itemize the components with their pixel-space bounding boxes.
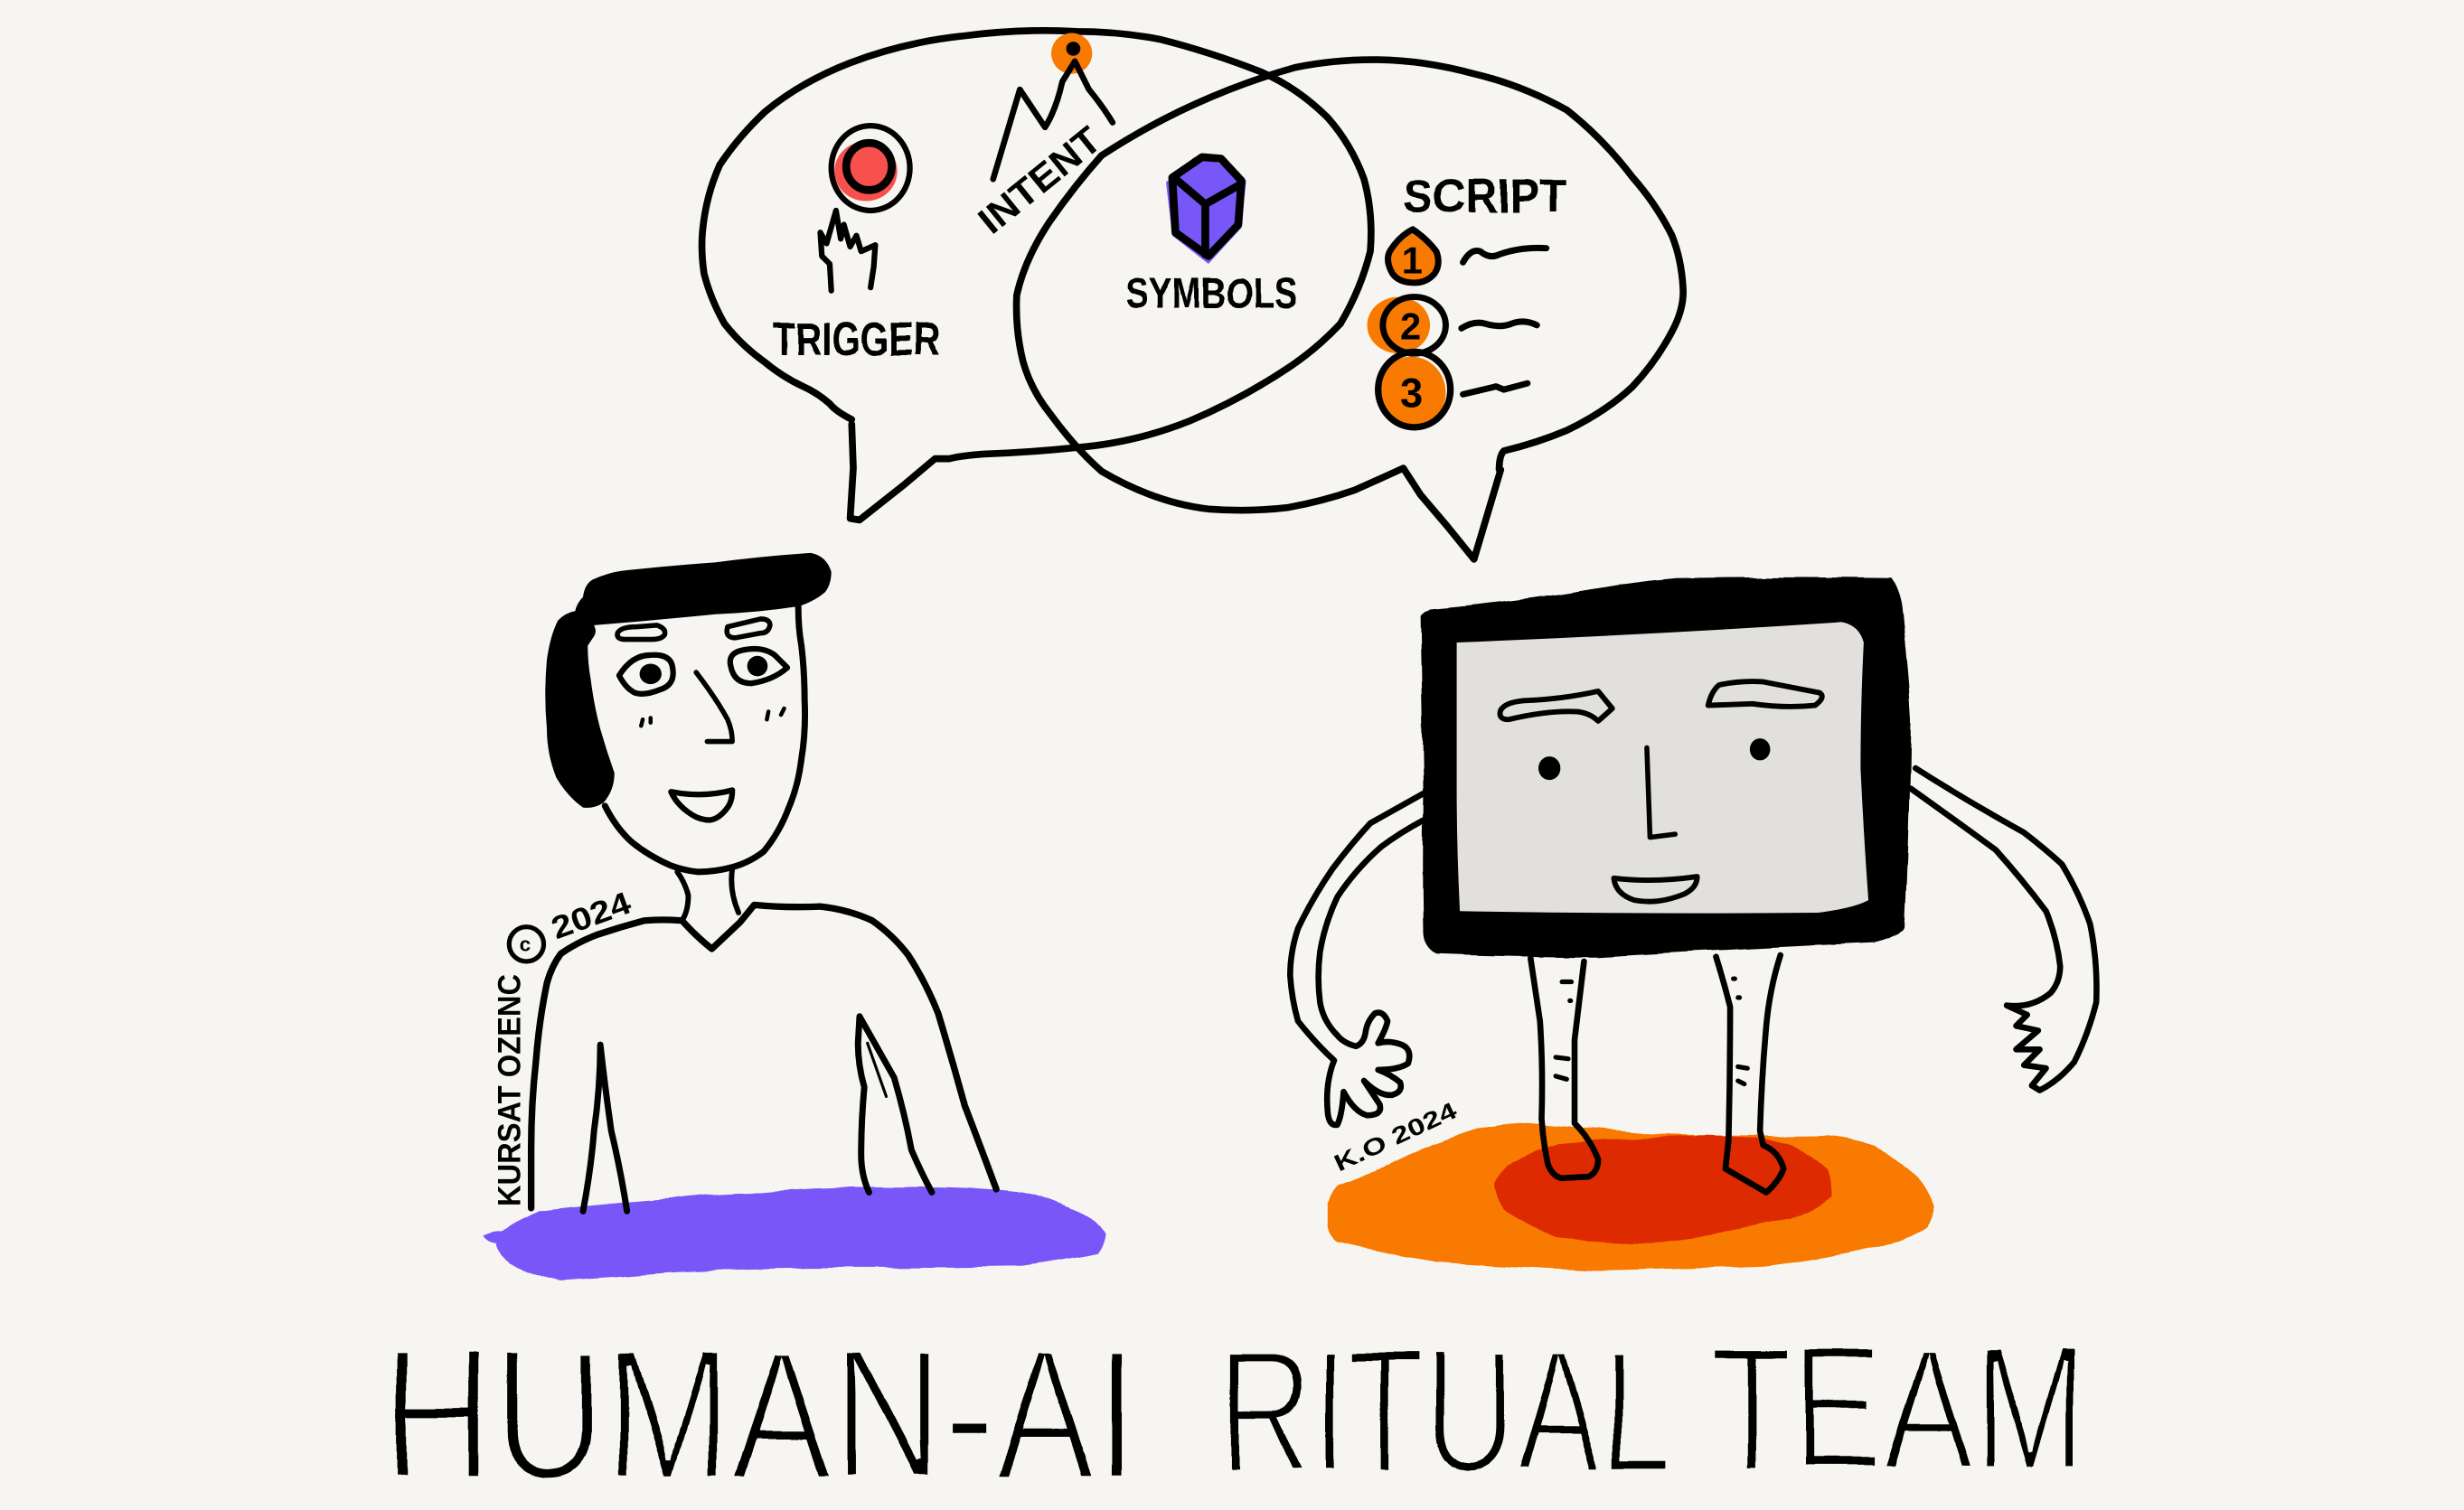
title: [383, 1310, 2087, 1510]
title: TEAM: [1710, 1310, 2087, 1506]
label: trigger: TRIGGER: [773, 314, 940, 366]
purple table: [483, 1187, 1105, 1280]
nose: [696, 672, 732, 742]
right eyebrow: [727, 619, 770, 638]
collar and shoulders: [531, 905, 996, 1208]
left eyebrow: [617, 625, 665, 640]
script step 1: 1: [1402, 239, 1423, 281]
signature: K.O 2024: K.O 2024: [1330, 1096, 1462, 1177]
left arm crease: [583, 1045, 627, 1211]
title: RITUAL: [1219, 1314, 1672, 1510]
signature: Kursat Ozenc 2024: KURSAT OZENC: [493, 974, 527, 1206]
speech bubble: human: [702, 31, 1371, 520]
character: human at table: [483, 553, 1105, 1280]
robot left eyebrow: [1500, 691, 1613, 721]
icon: intent mountain with goal point: [993, 33, 1113, 179]
label: intent: INTENT: [970, 117, 1109, 242]
screen black frame: [1421, 577, 1911, 957]
robot eyes: [1538, 738, 1770, 780]
freckles: [641, 708, 785, 726]
script step 2: [1368, 297, 1537, 353]
neck: [677, 868, 738, 921]
right arm crease: [858, 1017, 932, 1192]
signature: Kursat Ozenc 2024: [493, 886, 636, 1206]
script step 3: 3: [1400, 370, 1423, 416]
robot nose: [1647, 748, 1675, 838]
left arm and open hand: [1290, 793, 1424, 1125]
icon: purple symbol gem: [1166, 157, 1246, 264]
hair: [545, 553, 832, 808]
script step 2: 2: [1400, 305, 1421, 348]
left eye: [619, 655, 673, 694]
robot mouth: [1613, 877, 1698, 902]
inner sleeve line: [868, 1043, 887, 1096]
label: symbols: SYMBOLS: [1125, 270, 1298, 317]
signature: Kursat Ozenc 2024: c: [520, 933, 531, 956]
label: script: SCRIPT: [1403, 171, 1566, 223]
right leg: [1716, 955, 1783, 1192]
screen face panel: [1457, 622, 1868, 914]
script step 1: [1387, 230, 1547, 283]
orange puddle: [1326, 1123, 1934, 1271]
face outline: [605, 606, 805, 872]
smiling mouth: [671, 790, 732, 820]
leg marks: [1556, 979, 1747, 1084]
left leg: [1530, 958, 1598, 1178]
signature: Kursat Ozenc 2024: 2024: [547, 886, 636, 946]
speech bubble: AI: [1017, 60, 1683, 559]
red centre of puddle: [1494, 1136, 1833, 1243]
character: AI screen robot: [1290, 577, 2096, 1271]
icon: pointing hand: [821, 211, 875, 291]
script step 3: [1377, 352, 1528, 429]
right eye: [730, 649, 787, 683]
robot right eyebrow: [1708, 681, 1822, 707]
icon: red trigger button: [832, 126, 910, 211]
right arm and hand: [1911, 768, 2096, 1090]
diagram: overlapping speech bubbles: [702, 31, 1683, 559]
